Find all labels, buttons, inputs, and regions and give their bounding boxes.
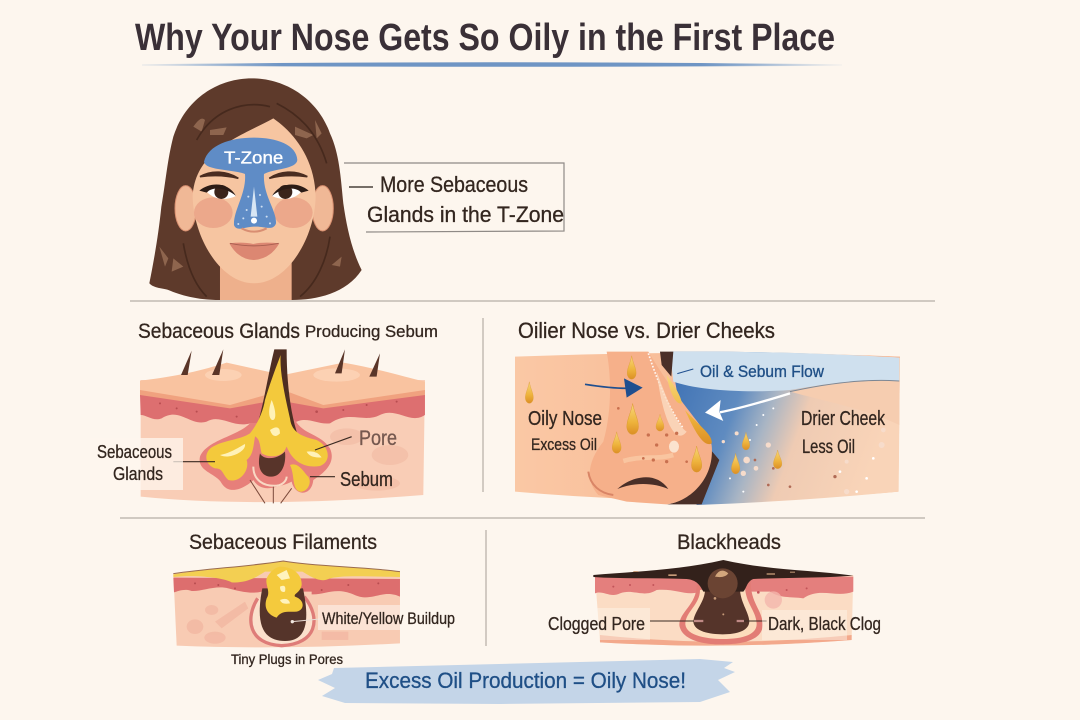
ears bbox=[175, 186, 333, 231]
eyes and brows bbox=[199, 172, 309, 199]
illustration: woman's face with T-zone bbox=[149, 78, 362, 300]
arrow: into nose bbox=[585, 378, 643, 398]
label: pore: Pore bbox=[359, 427, 397, 450]
label: sebaceous glands bbox=[90, 438, 183, 490]
neck bbox=[220, 257, 292, 300]
oil drops bbox=[525, 356, 782, 474]
callout: more sebaceous glands bbox=[344, 163, 564, 232]
pore ring bbox=[679, 578, 763, 644]
label: oily nose: Oily Nose bbox=[528, 408, 602, 430]
heading bbox=[138, 320, 438, 343]
nose shape bbox=[590, 352, 712, 504]
panel: sebaceous filaments bbox=[173, 531, 455, 667]
plug bbox=[260, 588, 306, 641]
face shape bbox=[193, 118, 316, 283]
label: oily nose: Excess Oil bbox=[531, 435, 597, 454]
heading: Oilier Nose vs. Drier Cheeks bbox=[518, 318, 775, 343]
callout: more sebaceous glands: Glands in the T-Zone bbox=[367, 202, 564, 227]
label: drier cheek: Less Oil bbox=[802, 437, 855, 458]
sebum bbox=[206, 355, 328, 481]
hair bbox=[149, 78, 362, 300]
label: oily nose bbox=[528, 408, 602, 454]
nostril bbox=[617, 477, 668, 489]
label: sebum: Sebum bbox=[340, 469, 393, 491]
arrow: flow from cheek bbox=[705, 393, 790, 421]
cheeks bbox=[194, 197, 313, 228]
banner: excess oil production bbox=[318, 659, 735, 704]
title: Why Your Nose Gets So Oily in the First Place bbox=[135, 17, 835, 59]
heading: Producing Sebum bbox=[305, 322, 438, 341]
label: white/yellow buildup: White/Yellow Buildup bbox=[322, 609, 455, 628]
lips bbox=[229, 243, 279, 260]
banner: excess oil production: Excess Oil Production = Oily Nose! bbox=[365, 668, 686, 693]
label: clogged pore bbox=[548, 608, 650, 640]
panel: oilier nose vs drier cheeks bbox=[515, 318, 900, 505]
label: dark, black clog bbox=[762, 610, 881, 640]
panel: blackheads bbox=[548, 531, 881, 646]
pore ring bbox=[251, 597, 314, 646]
heading: Sebaceous Glands bbox=[138, 320, 300, 343]
callout: more sebaceous glands: More Sebaceous bbox=[380, 172, 528, 197]
label: white/yellow buildup bbox=[318, 605, 455, 630]
heading: Blackheads bbox=[677, 531, 781, 554]
clog bbox=[693, 588, 749, 634]
label: sebaceous glands: Glands bbox=[113, 464, 163, 484]
label: drier cheek bbox=[801, 408, 886, 458]
T-Zone label: T-Zone bbox=[224, 148, 283, 168]
panel: sebaceous glands producing sebum bbox=[90, 320, 438, 503]
diagram: nose and cheek bbox=[515, 352, 900, 505]
diagram: blackhead in pore bbox=[593, 560, 853, 646]
pore plug bbox=[259, 452, 285, 477]
black surface bbox=[593, 560, 853, 592]
label: drier cheek: Drier Cheek bbox=[801, 408, 886, 430]
gland halo bbox=[200, 420, 332, 493]
label: clogged pore: Clogged Pore bbox=[548, 614, 645, 634]
label: tiny plugs in pores: Tiny Plugs in Pores bbox=[231, 651, 343, 667]
surface oil bbox=[173, 561, 400, 582]
oil streak bbox=[667, 375, 712, 444]
T-zone area bbox=[204, 138, 297, 229]
label: sebaceous glands: Sebaceous bbox=[97, 442, 172, 462]
label: dark, black clog: Dark, Black Clog bbox=[768, 614, 881, 634]
diagram: skin cross-section bbox=[140, 349, 425, 503]
diagram: filament in pore bbox=[173, 561, 400, 647]
heading: Sebaceous Filaments bbox=[189, 531, 377, 554]
label: oil and sebum flow: Oil & Sebum Flow bbox=[700, 362, 825, 381]
nose tip bbox=[242, 228, 267, 232]
